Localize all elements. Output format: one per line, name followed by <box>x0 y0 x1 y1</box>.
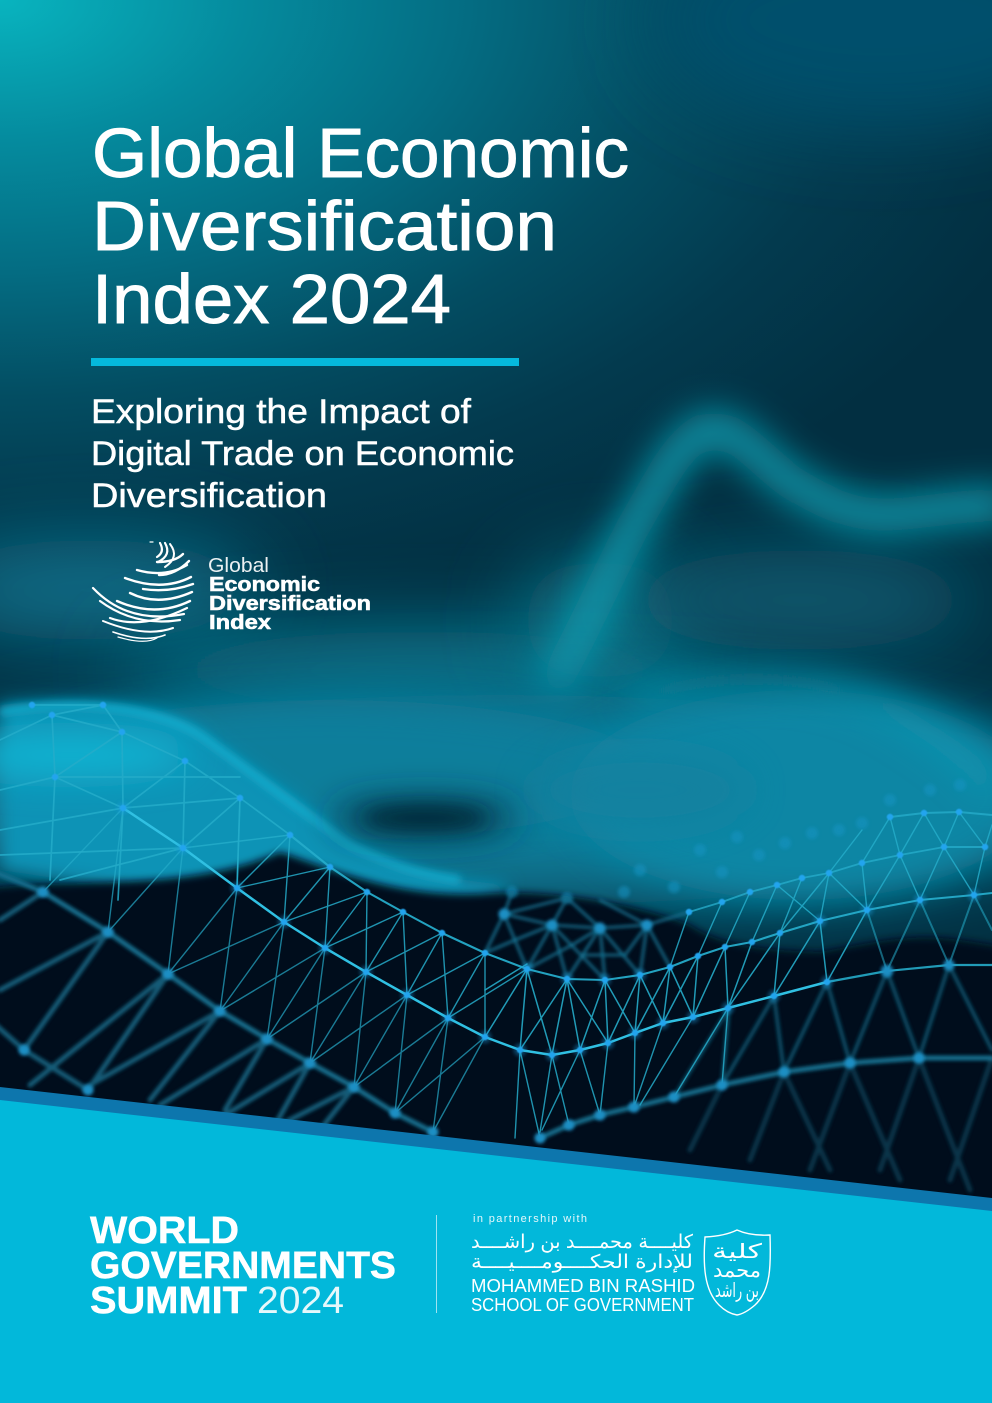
Arabic name <box>471 1232 694 1273</box>
title rule <box>91 358 519 366</box>
mesh: sharp ridge lines <box>0 705 992 1138</box>
logo wordmark: Diversification <box>209 592 371 615</box>
subtitle: Digital Trade on Economic <box>91 435 514 473</box>
title: Global Economic <box>92 114 629 192</box>
background gradient <box>0 0 992 958</box>
Arabic name: كليــــة محمــــد بن راشــــد <box>471 1232 694 1253</box>
logo: Mohammed Bin Rashid School of Government: SCHOOL OF GOVERNMENT <box>471 1294 694 1315</box>
central X mesh <box>485 910 867 1055</box>
logo wordmark: Global <box>208 554 269 577</box>
icon: calligraphy shield: بن راشد <box>715 1280 759 1302</box>
logo: World Governments Summit 2024: SUMMIT <box>90 1280 247 1322</box>
logo: World Governments Summit 2024: 2024 <box>257 1280 344 1322</box>
blurred mist and streaks <box>0 428 992 930</box>
title: Index 2024 <box>92 260 451 338</box>
logo: Global Economic Diversification Index <box>93 542 371 641</box>
dark base of the wave <box>0 846 992 1198</box>
right mesh between ridges <box>670 812 992 967</box>
logo wordmark: Economic <box>209 573 320 596</box>
footer divider <box>436 1215 437 1313</box>
footer band <box>0 1087 992 1403</box>
title: Diversification <box>92 187 557 265</box>
subtitle: Diversification <box>91 477 327 515</box>
mesh: blurred foreground lines <box>0 870 992 1190</box>
logo wordmark <box>208 554 371 634</box>
icon: calligraphy shield: كلية <box>712 1241 763 1263</box>
partnership label: in partnership with <box>473 1213 587 1225</box>
title <box>92 114 629 338</box>
Arabic name: للإدارة الحكــــومــــيــــة <box>471 1252 693 1273</box>
English name: MOHAMMED BIN RASHID <box>471 1275 695 1296</box>
logo: World Governments Summit 2024: WORLD <box>90 1210 239 1252</box>
subtitle <box>91 393 514 515</box>
subtitle: Exploring the Impact of <box>91 393 472 431</box>
logo: World Governments Summit 2024: GOVERNMENTS <box>90 1245 396 1287</box>
logo wordmark: Index <box>209 611 272 634</box>
mesh: nodes <box>24 705 985 1138</box>
icon: striped globe <box>93 542 193 641</box>
logo: World Governments Summit 2024 <box>90 1210 396 1322</box>
icon: calligraphy shield: محمد <box>713 1260 761 1282</box>
mesh: blurred far dots in the mist <box>512 785 960 898</box>
logo: Mohammed Bin Rashid School of Government <box>471 1213 770 1315</box>
icon: calligraphy shield <box>704 1230 770 1315</box>
left mesh between ridges <box>186 834 525 1034</box>
